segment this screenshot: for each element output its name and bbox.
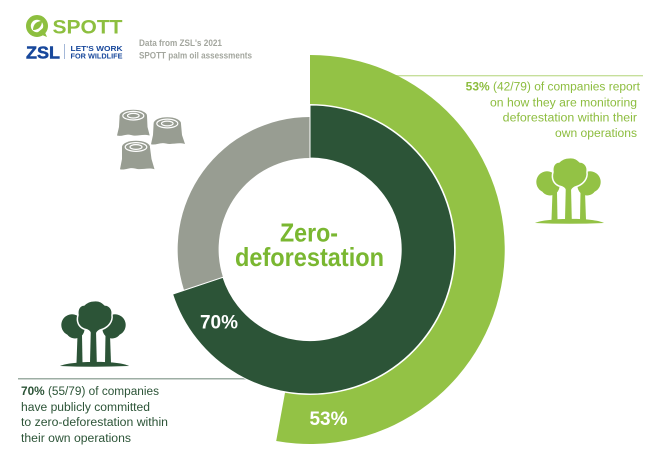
logo: ZSL: ZSL [26, 42, 60, 62]
donut chart [173, 55, 505, 444]
logo: ZSL: LET'S WORK [70, 44, 123, 53]
stump 1 [117, 110, 150, 136]
callout: 53% monitoring: deforestation within their [503, 112, 637, 124]
data source note: SPOTT palm oil assessments [139, 50, 252, 62]
icon: tree stumps [117, 110, 185, 170]
callout: 70% committed: have publicly committed [21, 402, 150, 414]
donut centre title: deforestation [235, 242, 384, 272]
label: 53%: 53% [310, 409, 348, 430]
label: 70%: 70% [200, 312, 238, 334]
stump 3 [120, 141, 154, 170]
logo: ZSL: FOR WILDLIFE [70, 51, 122, 60]
grey ring: uncommitted remainder [178, 117, 310, 290]
icon: dark green trees [60, 301, 129, 367]
callout: 53% monitoring: own operations [555, 128, 637, 140]
callout: 70% committed: their own operations [21, 433, 131, 445]
logo: SPOTT [28, 17, 123, 38]
stump 2 [151, 117, 185, 145]
callout: 53% monitoring [466, 82, 641, 140]
callout: 53% monitoring: on how they are monitoring [490, 98, 637, 110]
donut centre title: Zero- [280, 218, 338, 248]
callout: 53% monitoring: 53% (42/79) of companies report [466, 82, 641, 94]
data source note: Data from ZSL's 2021 [139, 38, 223, 49]
callout: 70% committed: to zero-deforestation within [21, 417, 168, 429]
donut centre title [235, 218, 384, 272]
data source note [139, 38, 252, 62]
logo: ZSL [26, 42, 123, 62]
callout: 70% committed: 70% (55/79) of companies [21, 386, 159, 398]
outer arc: 53% monitoring [276, 55, 505, 444]
icon: light green trees [535, 158, 604, 224]
dark ring: 70% committed [173, 105, 455, 394]
logo: SPOTT: SPOTT [52, 17, 123, 38]
callout: 70% committed [21, 386, 168, 445]
